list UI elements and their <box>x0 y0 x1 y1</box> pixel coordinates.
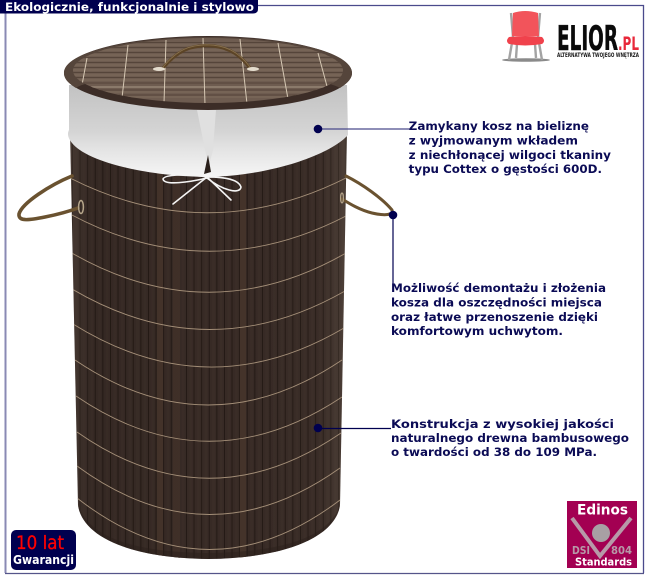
lid slat pattern <box>70 38 350 105</box>
warranty badge <box>11 530 76 570</box>
callout: folding: oraz łatwe przenoszenie dzięki <box>391 310 598 324</box>
Edinos badge: Edinos <box>577 502 628 518</box>
callout: construction: naturalnego drewna bambusowego <box>391 431 629 445</box>
Edinos badge: DSI <box>572 544 590 557</box>
callout: liner: Zamykany kosz na bieliznę <box>409 119 589 133</box>
callout: folding: komfortowym uchwytom. <box>391 324 563 338</box>
callout: construction: o twardości od 38 do 109 MPa. <box>391 445 597 459</box>
callout: liner: z niechłonącej wilgoci tkaniny <box>409 148 611 162</box>
Edinos badge: Standards <box>575 556 632 568</box>
callout: folding <box>389 211 606 338</box>
Edinos badge: 804 <box>611 544 632 557</box>
liner pleat <box>197 110 216 165</box>
basket body <box>70 136 347 559</box>
callout: construction: Konstrukcja z wysokiej jakości <box>391 417 614 431</box>
callout: liner <box>314 119 611 176</box>
rope bindings <box>70 177 348 550</box>
icon: red chair <box>502 11 550 62</box>
callout: liner: typu Cottex o gęstości 600D. <box>409 162 602 176</box>
title banner: Ekologicznie, funkcjonalnie i stylowo <box>5 0 254 14</box>
warranty badge: Gwarancji <box>13 553 74 567</box>
bottom rim shadow <box>78 506 340 559</box>
callout: folding: Możliwość demontażu i złożenia <box>391 281 606 295</box>
fabric liner <box>68 85 348 177</box>
lid <box>64 36 352 110</box>
Edinos badge <box>567 501 637 568</box>
callout: construction <box>314 417 629 459</box>
callout: liner: z wyjmowanym wkładem <box>409 134 578 148</box>
left basket handle <box>19 176 83 220</box>
warranty badge: 10 lat <box>16 532 64 554</box>
drawstring bow <box>163 175 241 204</box>
callout: folding: kosza dla oszczędności miejsca <box>391 296 602 310</box>
lid handle <box>153 45 259 71</box>
right basket handle <box>341 176 392 215</box>
liner slit <box>204 155 211 174</box>
Elior logo <box>502 11 639 62</box>
